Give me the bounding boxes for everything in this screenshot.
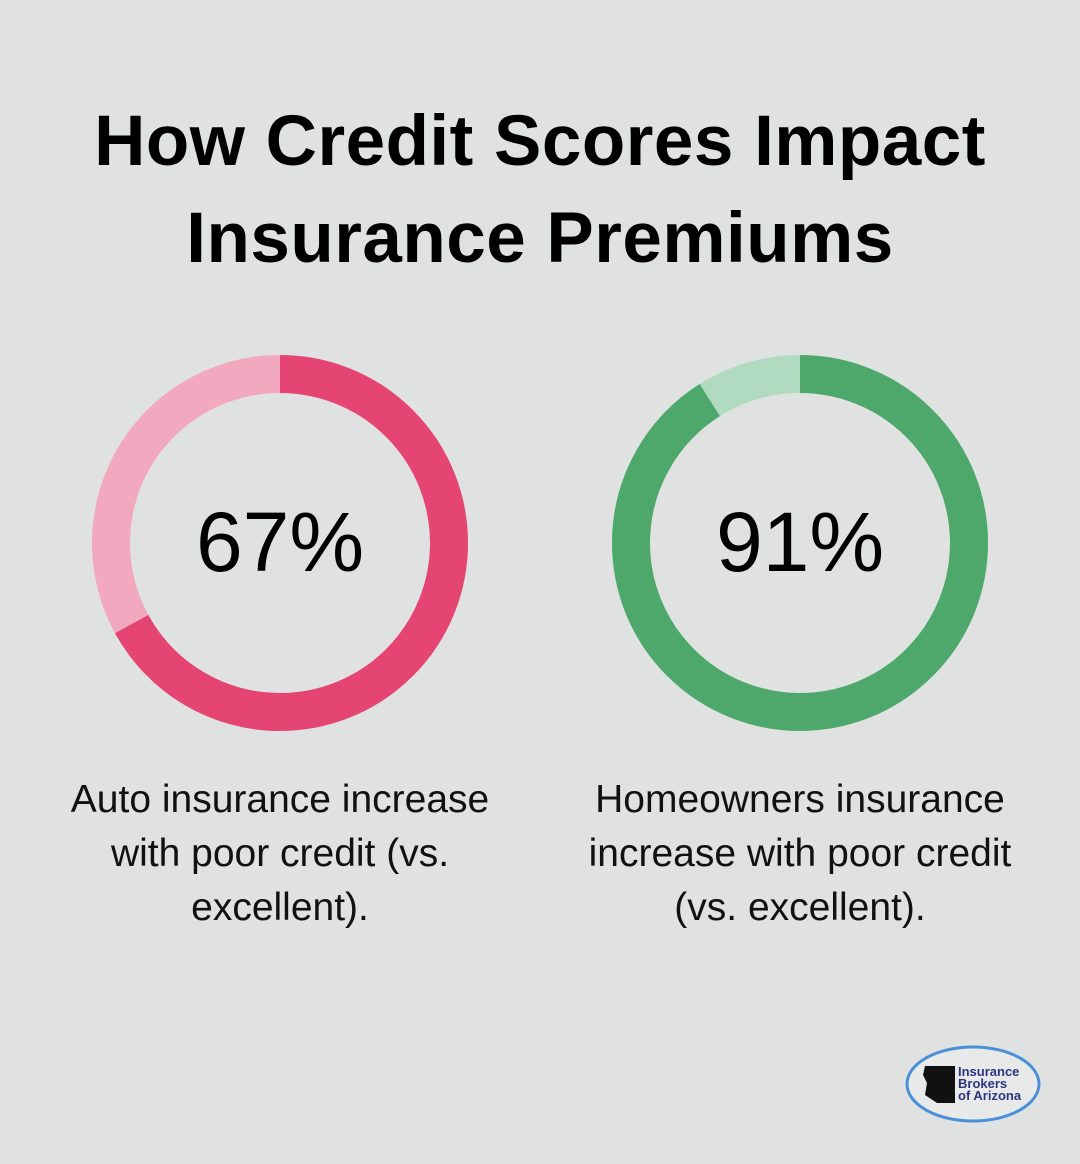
label: auto: excellent). xyxy=(191,886,369,929)
chart: auto donut xyxy=(92,355,468,731)
logo: Insurance xyxy=(958,1064,1019,1079)
label: auto xyxy=(70,778,489,929)
label: auto: Auto insurance increase xyxy=(71,778,489,821)
logo: Brokers xyxy=(958,1076,1007,1091)
title: How Credit Scores Impact xyxy=(94,102,986,181)
label: home: increase with poor credit xyxy=(589,832,1011,875)
label: home: Homeowners insurance xyxy=(595,778,1005,821)
chart: home donut: 91% xyxy=(716,495,884,589)
label: home xyxy=(589,778,1012,929)
logo: of Arizona xyxy=(958,1088,1022,1103)
title xyxy=(94,102,986,278)
label: home: (vs. excellent). xyxy=(674,886,926,929)
title: Insurance Premiums xyxy=(186,199,894,278)
label: auto: with poor credit (vs. xyxy=(111,832,449,875)
chart: auto donut: 67% xyxy=(196,495,364,589)
logo xyxy=(906,1046,1040,1122)
chart: home donut xyxy=(612,355,988,731)
